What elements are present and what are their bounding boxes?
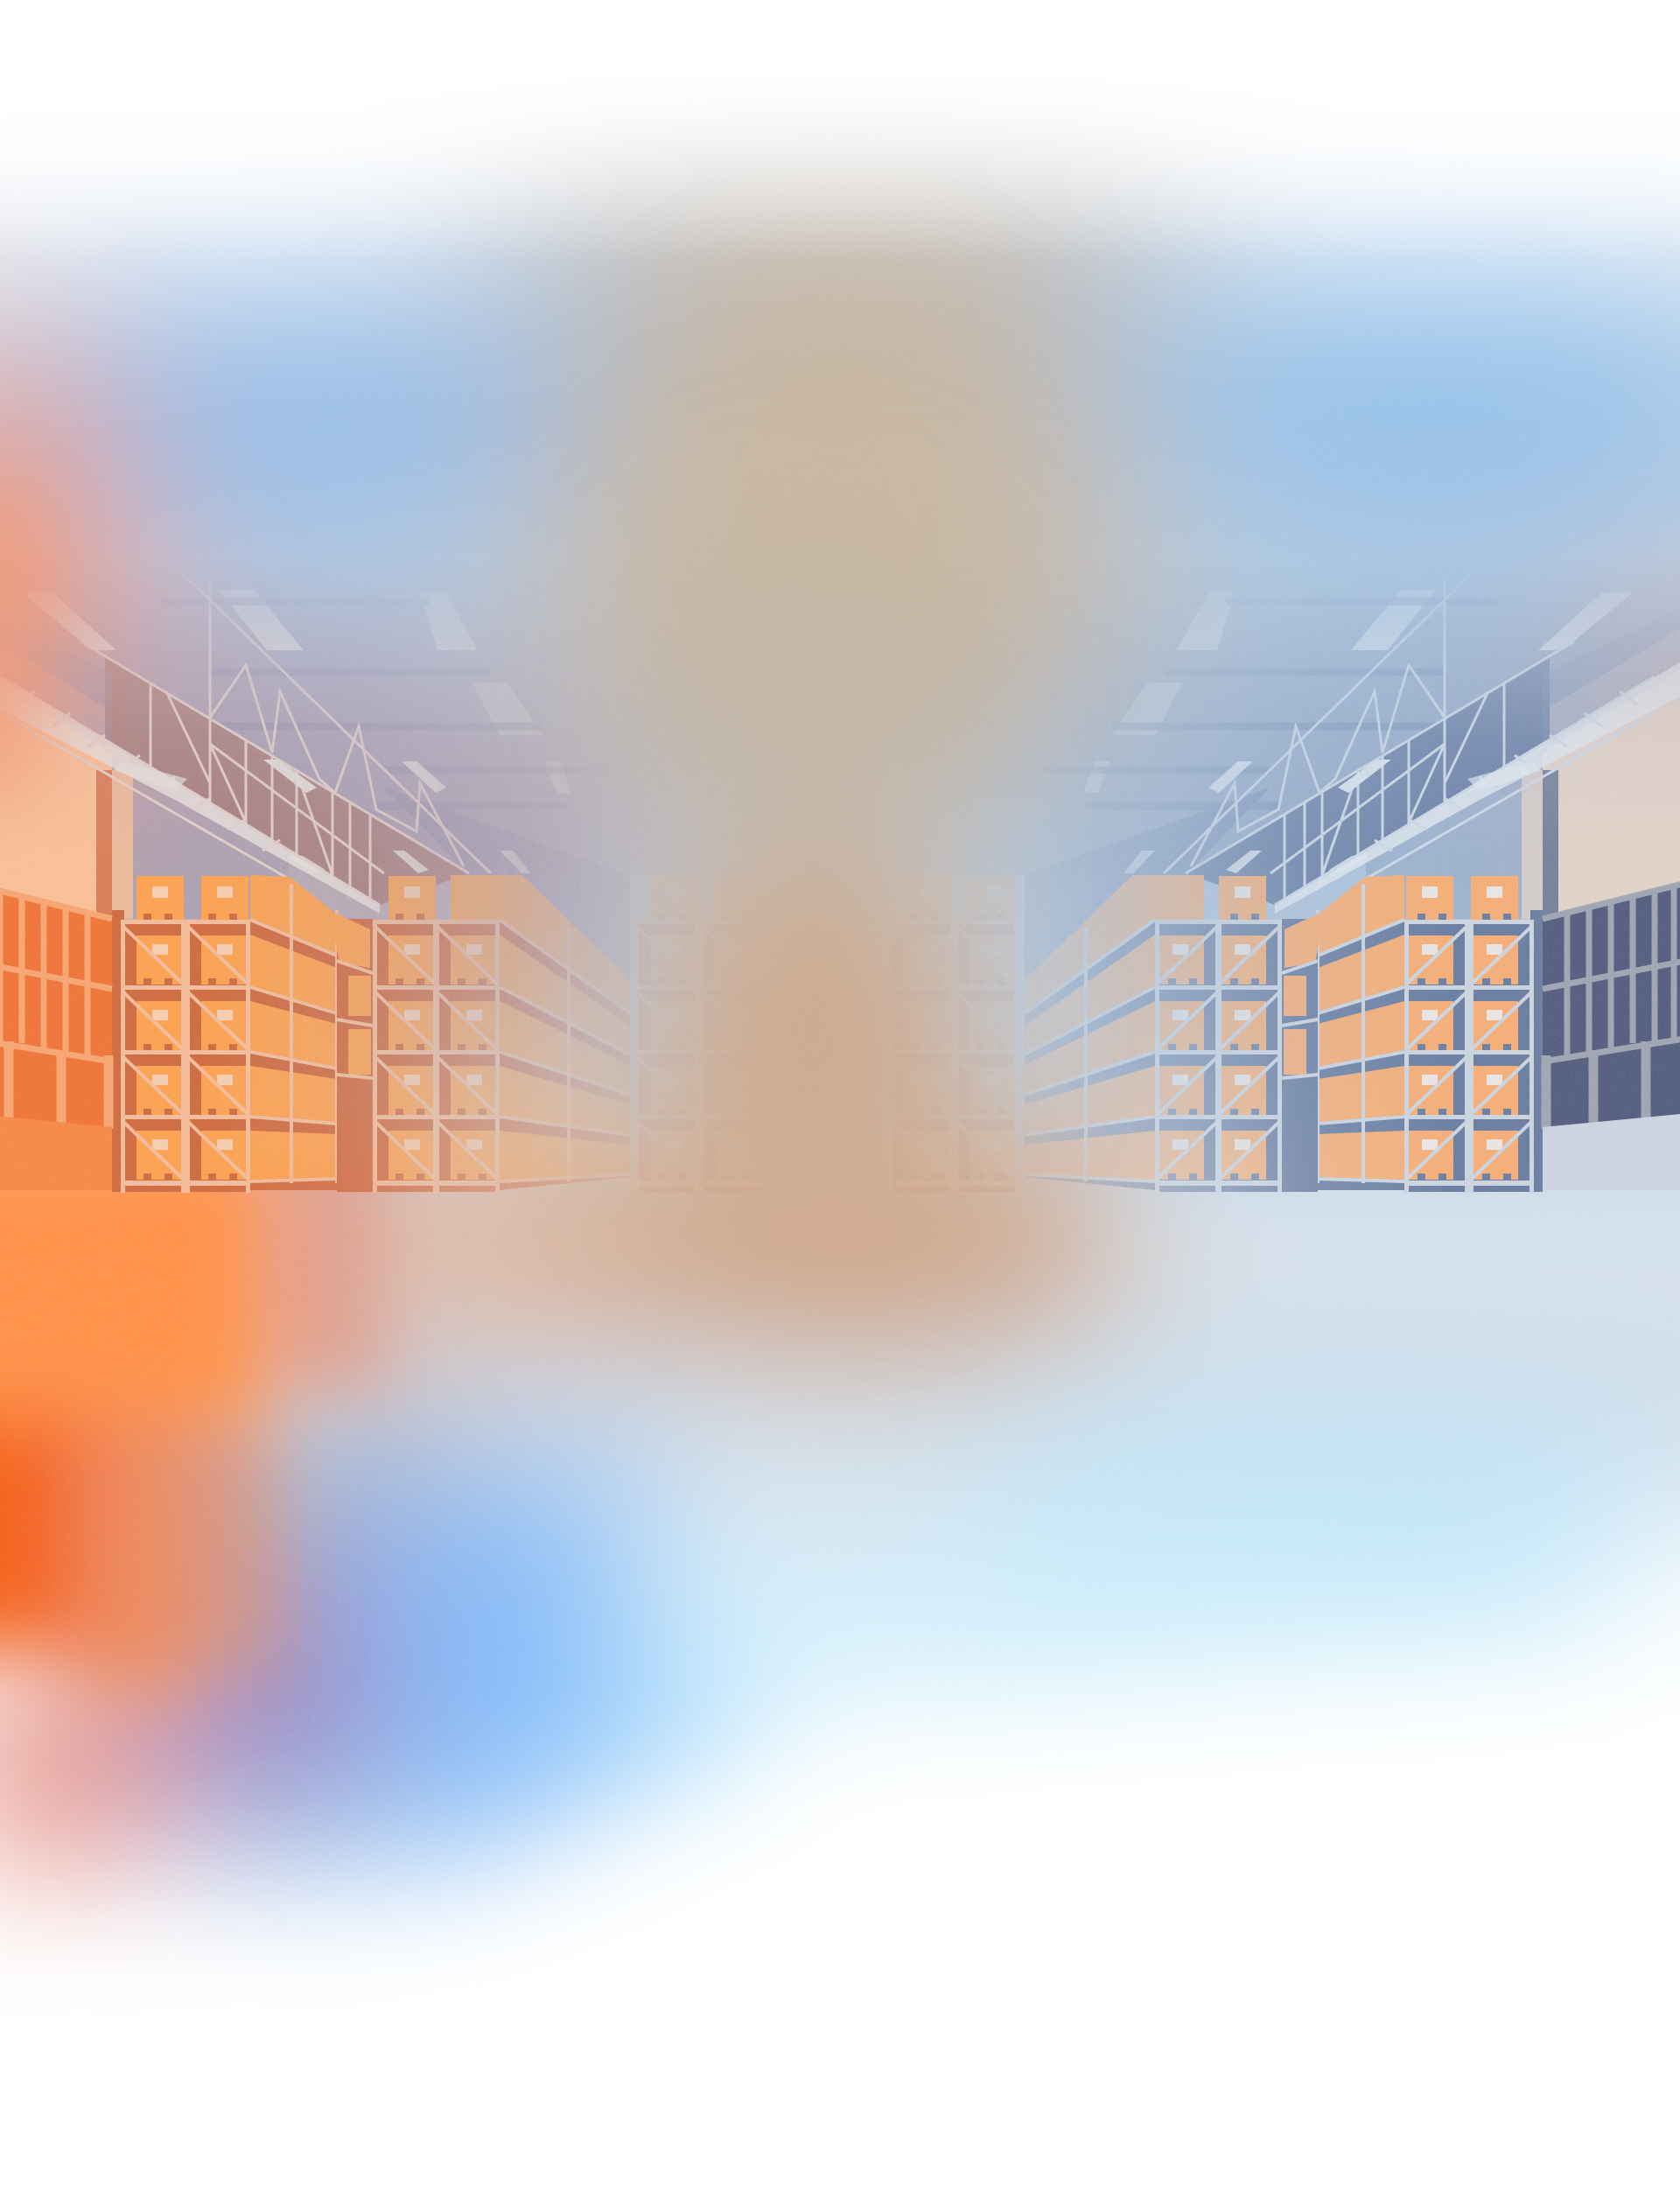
back aisle racks, faint (634, 876, 1018, 1193)
floor and lower colour washes (0, 1120, 1680, 1890)
warehouse scene: right half in blue (850, 490, 1680, 1193)
back haze: blue sky bands and tan centre (0, 175, 1680, 1251)
warehouse scene: left half in orange (0, 490, 805, 1193)
lower right white wash (0, 1715, 1680, 2193)
salmon glow on left edge (0, 481, 44, 814)
top white fade (0, 0, 1680, 263)
centre peach haze over the racks (656, 525, 971, 1234)
speckled grain texture (0, 438, 1680, 1663)
orange streaks on the left floor (0, 1138, 385, 1698)
